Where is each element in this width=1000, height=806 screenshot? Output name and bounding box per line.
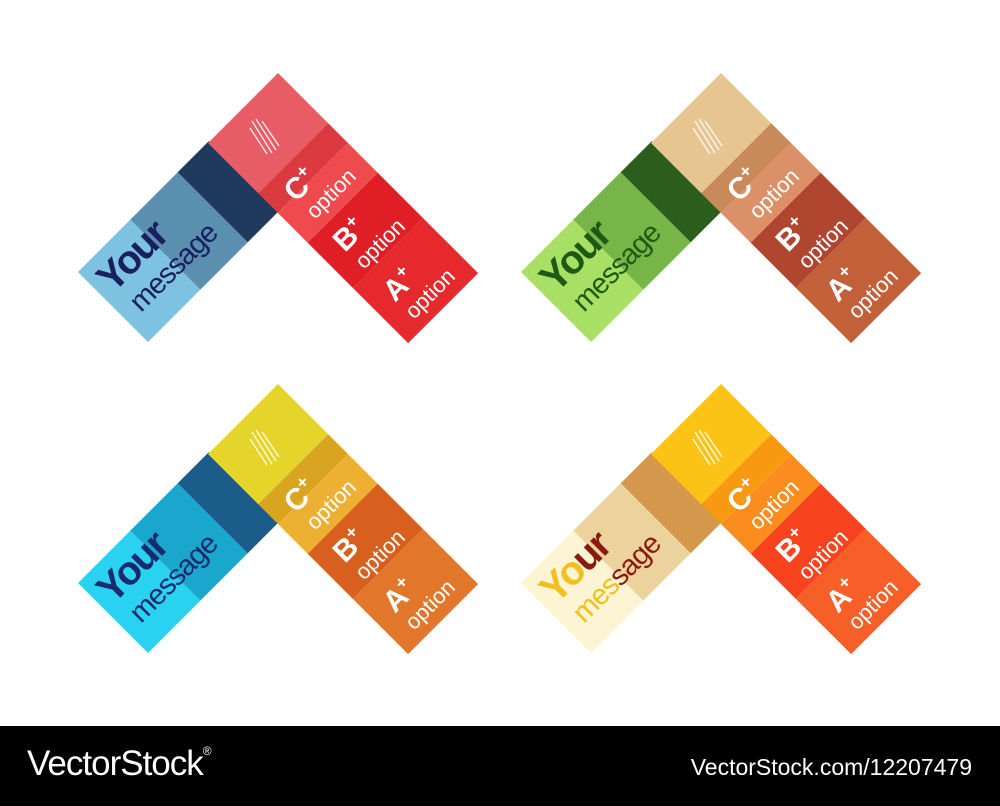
chevron: green brown (top-right): + — [735, 160, 756, 182]
chevron: cyan orange (bottom-left): C — [278, 480, 316, 519]
chevron: cream orange (bottom-right): B — [770, 530, 808, 569]
text: options: option — [301, 163, 361, 224]
chevron: green brown (top-right) — [521, 73, 921, 343]
chevron: green brown (top-right): + — [784, 210, 805, 232]
chevron: green brown (top-right): B — [770, 219, 808, 258]
text: Your message: message — [123, 217, 224, 318]
chevron: blue red (top-left) — [78, 73, 478, 343]
chevron: green brown (top-right): option — [744, 163, 804, 224]
text: options: + — [341, 210, 362, 232]
footer url: VectorStock.com/12207479 — [691, 754, 972, 780]
text: options: + — [292, 160, 313, 182]
chevron: cream orange (bottom-right): Your — [531, 523, 620, 611]
chevron: cream orange (bottom-right): + — [834, 571, 855, 593]
chevron: cyan orange (bottom-left): B — [327, 530, 365, 569]
chevron: cream orange (bottom-right): option — [843, 574, 903, 635]
chevron: green brown (top-right): message — [566, 217, 667, 318]
footer bar — [0, 726, 1000, 806]
left arm — [78, 141, 279, 342]
chevron: green brown (top-right): Your — [531, 212, 620, 300]
chevron: cyan orange (bottom-left): + — [341, 521, 362, 543]
chevron: cyan orange (bottom-left): + — [391, 571, 412, 593]
chevron: cream orange (bottom-right): + — [735, 471, 756, 493]
text: options — [276, 160, 460, 324]
chevron: cyan orange (bottom-left): option — [350, 524, 410, 585]
footer logo: VectorStock® — [27, 744, 211, 783]
text: options: option — [400, 263, 460, 324]
chevron: cream orange (bottom-right) — [521, 384, 921, 654]
text: Your message: Your — [88, 212, 177, 300]
chevron: cream orange (bottom-right): message — [566, 528, 667, 629]
text: options: C — [278, 169, 316, 208]
chevron: cream orange (bottom-right): + — [784, 521, 805, 543]
chevron: cream orange (bottom-right): C — [721, 480, 759, 519]
icon: lines — [250, 119, 279, 154]
chevron: cyan orange (bottom-left): message — [123, 528, 224, 629]
chevron: cream orange (bottom-right): option — [744, 474, 804, 535]
chevron: green brown (top-right): + — [834, 260, 855, 282]
chevron: cream orange (bottom-right): A — [820, 580, 858, 619]
chevron: green brown (top-right): C — [721, 169, 759, 208]
text: options: B — [327, 219, 365, 258]
chevron: cyan orange (bottom-left): A — [377, 580, 415, 619]
chevron: cyan orange (bottom-left): option — [400, 574, 460, 635]
right arm — [208, 73, 478, 343]
text: options: + — [391, 260, 412, 282]
chevron: cyan orange (bottom-left): option — [301, 474, 361, 535]
text: options: option — [350, 213, 410, 274]
chevron: cyan orange (bottom-left): + — [292, 471, 313, 493]
chevron: green brown (top-right): option — [843, 263, 903, 324]
chevron: green brown (top-right): A — [820, 269, 858, 308]
chevron: cream orange (bottom-right): option — [793, 524, 853, 585]
chevron: green brown (top-right): option — [793, 213, 853, 274]
text: options: A — [377, 269, 415, 308]
chevron: cyan orange (bottom-left) — [78, 384, 478, 654]
chevron: cyan orange (bottom-left): Your — [88, 523, 177, 611]
